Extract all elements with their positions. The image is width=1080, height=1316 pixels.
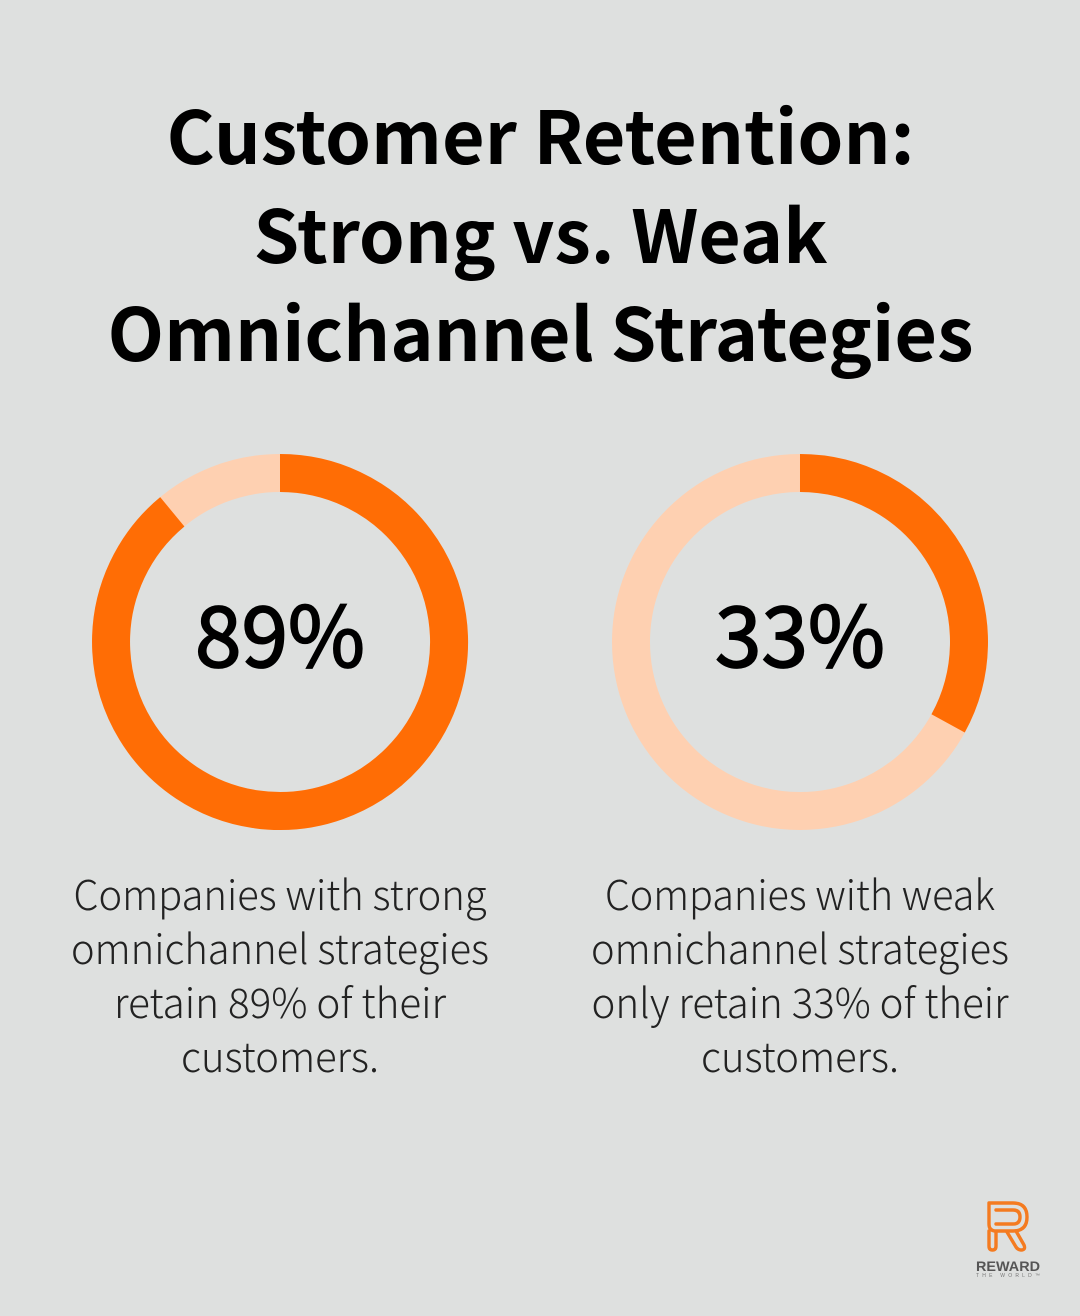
text block: weak strategies: customers. [701,1024,899,1084]
text block: weak strategies [591,862,1009,1084]
icon: stylised R [989,1203,1027,1250]
title: Omnichannel Strategies [108,277,974,383]
text block: weak strategies: omnichannel strategies [591,916,1009,976]
title: Strong vs. Weak [254,179,828,285]
text block: strong strategies [71,862,489,1084]
donut chart: 89%: 89% [195,571,365,692]
logo: Reward the World: THE WORLD™ [976,1273,1040,1279]
text block: strong strategies: customers. [181,1024,379,1084]
text block: strong strategies: retain 89% of their [114,970,446,1030]
title: Customer Retention: [166,80,915,186]
wordmark: REWARD [976,1258,1040,1274]
text block: strong strategies: Companies with strong [74,862,486,922]
title [108,80,974,383]
donut chart: 33%: 33% [715,571,885,692]
text block: weak strategies: Companies with weak [605,862,995,922]
donut chart: 89% [111,473,449,811]
text block: weak strategies: only retain 33% of their [592,970,1009,1030]
text block: strong strategies: omnichannel strategies [71,916,489,976]
donut chart: 33% [631,473,969,811]
logo: Reward the World [976,1203,1040,1279]
